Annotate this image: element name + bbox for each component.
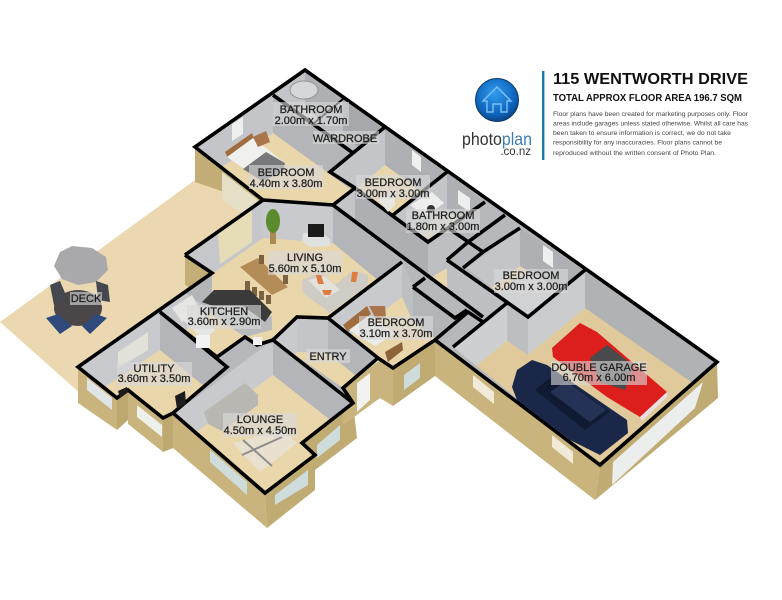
room: bathroom two xyxy=(396,174,470,240)
label: bedroom three xyxy=(494,269,568,293)
label: bathroom two xyxy=(406,209,480,233)
label: bathroom two: BATHROOM xyxy=(412,210,474,222)
label: bathroom one: 2.00m x 1.70m xyxy=(275,115,347,127)
label: living: 5.60m x 5.10m xyxy=(269,263,341,275)
label: deck: DECK xyxy=(71,293,102,305)
exterior brick walls xyxy=(78,147,718,528)
room: double garage xyxy=(454,272,692,462)
furniture: bathroom fixtures xyxy=(410,192,444,217)
room: bedroom four xyxy=(331,264,434,366)
label: living xyxy=(268,251,342,275)
furniture: living sofa xyxy=(302,270,368,313)
room: living and kitchen xyxy=(160,200,402,357)
furniture: plant xyxy=(266,209,280,244)
wall tops xyxy=(78,70,717,493)
label: kitchen xyxy=(187,305,261,329)
disclaimer text xyxy=(553,111,749,157)
label: bedroom one xyxy=(249,165,323,190)
furniture: deck umbrella and table xyxy=(46,246,110,334)
furniture: kitchen bench xyxy=(172,290,272,348)
label: double garage: 6.70m x 6.00m xyxy=(563,372,635,384)
label: bedroom two xyxy=(356,175,430,200)
label: bedroom two: BEDROOM xyxy=(365,177,421,189)
subtitle: TOTAL APPROX FLOOR AREA 196.7 SQM xyxy=(553,93,742,104)
room: bedroom two xyxy=(333,130,421,214)
room: entry xyxy=(276,319,355,387)
furniture: lounge sofa xyxy=(204,383,258,431)
label: lounge xyxy=(223,413,297,437)
room: bathroom one xyxy=(274,72,318,122)
accent divider xyxy=(542,71,544,160)
label: bedroom three: BEDROOM xyxy=(503,270,559,282)
label: bedroom one: 4.40m x 3.80m xyxy=(250,178,322,190)
furniture: shower xyxy=(290,81,318,99)
furniture: tv unit xyxy=(302,224,330,247)
label: bedroom one: BEDROOM xyxy=(258,167,314,179)
label: entry: ENTRY xyxy=(309,351,347,363)
room: utility xyxy=(81,312,203,416)
label: bedroom three: 3.00m x 3.00m xyxy=(495,281,567,293)
furniture: master bed and bedside xyxy=(225,131,285,181)
label: bedroom four: 3.10m x 3.70m xyxy=(360,328,432,340)
icon: house globe xyxy=(476,78,518,122)
label: wardrobe: WARDROBE xyxy=(313,133,377,145)
label: double garage xyxy=(551,361,647,385)
label: utility: UTILITY xyxy=(134,363,175,375)
furniture: bedroom two bed xyxy=(378,188,395,212)
disclaimer text: responsibility for any inaccuracies. Floor plans cannot be xyxy=(553,140,722,146)
label: lounge: 4.50m x 4.50m xyxy=(224,425,296,437)
label: utility: 3.60m x 3.50m xyxy=(118,373,190,385)
logo: photoplan xyxy=(462,78,532,158)
room: hallway xyxy=(336,190,447,288)
deck floor xyxy=(0,180,262,395)
exterior openings xyxy=(87,172,703,505)
disclaimer text: Floor plans have been created for marketing purposes only. Floor xyxy=(553,111,749,118)
label: utility xyxy=(117,362,192,386)
label: lounge: LOUNGE xyxy=(237,414,283,426)
disclaimer text: reproduced without the written consent of Photo Plan. xyxy=(553,150,716,157)
label: bathroom one xyxy=(273,102,349,127)
furniture: dining table xyxy=(240,255,288,304)
label: living: LIVING xyxy=(287,252,323,264)
logo wordmark: photoplan xyxy=(462,129,532,149)
label: bathroom one: BATHROOM xyxy=(280,104,342,116)
label: kitchen: 3.60m x 2.90m xyxy=(188,316,260,328)
room: bedroom one xyxy=(195,95,355,205)
house interior base xyxy=(78,70,717,493)
disclaimer text: been taken to ensure information is correct, we do not take xyxy=(553,130,731,137)
label: kitchen: KITCHEN xyxy=(200,306,248,318)
furniture: bedroom four bed xyxy=(343,306,403,362)
room labels xyxy=(70,102,647,437)
furniture: utility items xyxy=(118,387,186,409)
disclaimer text: areas include garages unless stated otherwise. Whilst all care has xyxy=(553,120,749,128)
room: wardrobe xyxy=(343,100,382,146)
label: bedroom four xyxy=(359,316,433,340)
label: bathroom two: 1.80m x 3.00m xyxy=(407,221,479,233)
label: double garage: DOUBLE GARAGE xyxy=(551,362,647,374)
logo domain: .co.nz xyxy=(500,146,531,158)
room: bedroom three xyxy=(467,228,574,314)
car: red convertible xyxy=(552,323,668,421)
room: lounge xyxy=(176,342,330,491)
furniture: lounge rug xyxy=(233,430,297,472)
title: 115 WENTWORTH DRIVE xyxy=(553,71,748,88)
label: bedroom two: 3.00m x 3.00m xyxy=(357,188,429,200)
car: navy suv xyxy=(512,360,628,455)
label: bedroom four: BEDROOM xyxy=(368,317,424,329)
